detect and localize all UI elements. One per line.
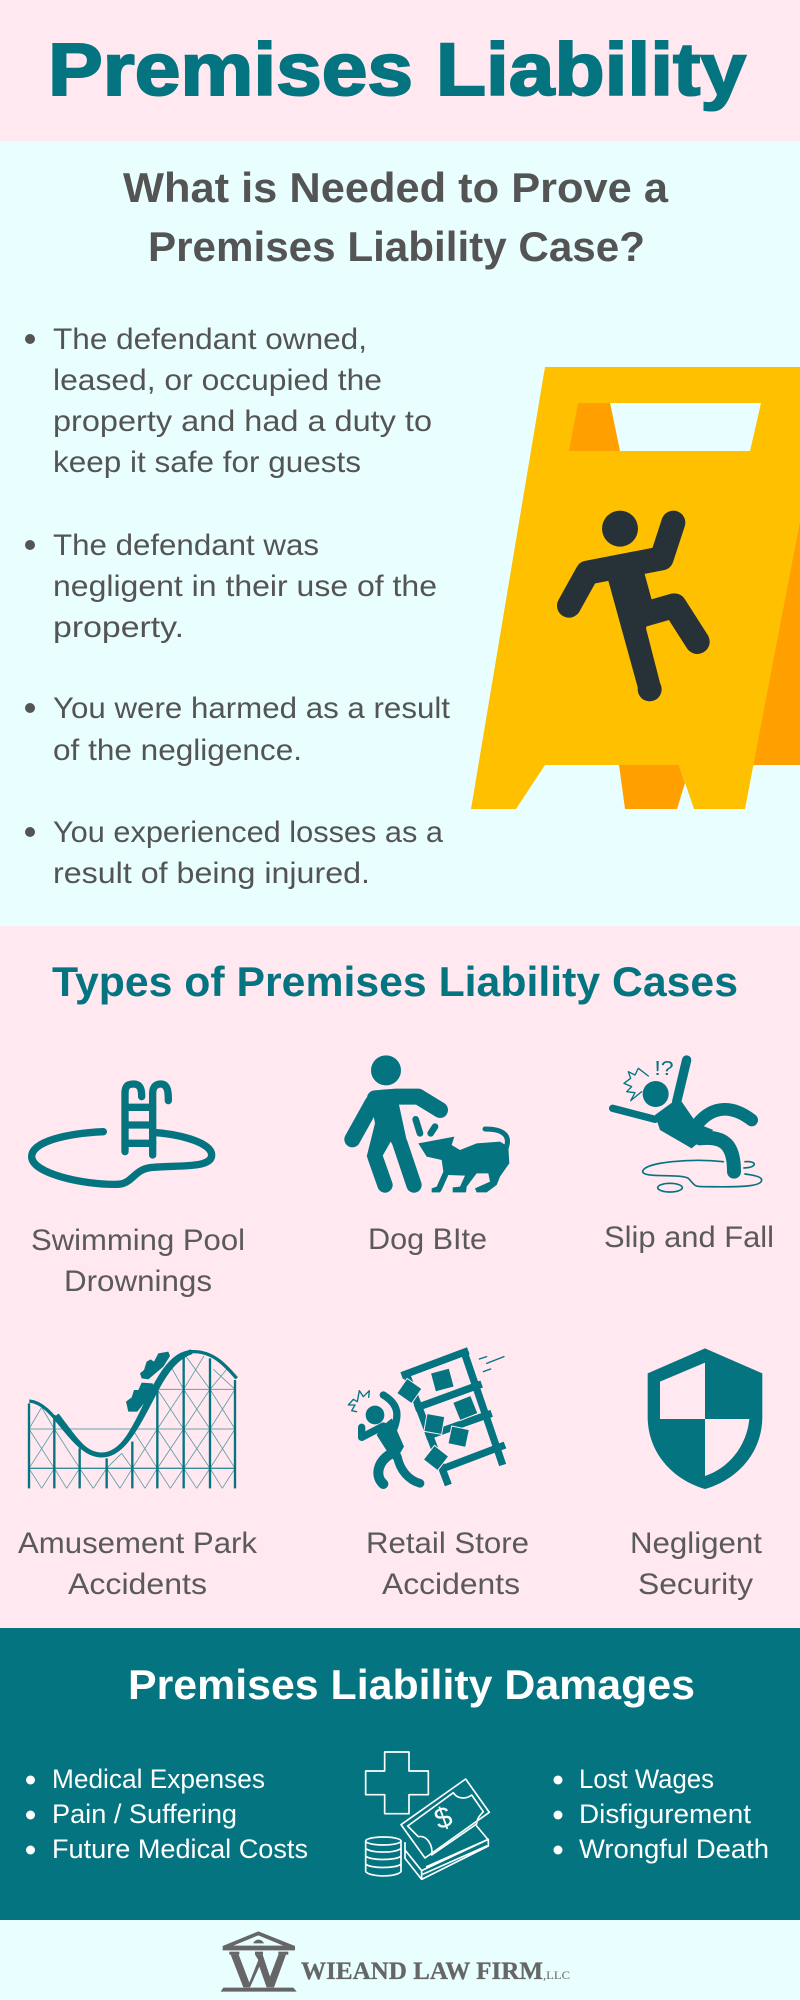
heading: what is needed xyxy=(123,164,669,270)
bullet list: requirements: keep it safe for guests xyxy=(53,446,361,479)
title: Premises Liability xyxy=(48,28,746,111)
bullet list: requirements: leased, or occupied the xyxy=(53,364,382,397)
heading: what is needed: Premises Liability Case? xyxy=(148,223,645,270)
label: slip and fall: Slip and Fall xyxy=(604,1221,774,1254)
list: damages left: Medical Expenses xyxy=(52,1764,265,1794)
icon: medical cross, cash and coins xyxy=(366,1752,489,1879)
panel: title band xyxy=(0,0,800,141)
bullet list: requirements: property and had a duty to xyxy=(53,405,432,438)
panel: footer xyxy=(0,1920,800,2000)
panel: what is needed to prove xyxy=(0,141,800,926)
heading: premises liability damages: Premises Liability Damages xyxy=(128,1661,695,1708)
bullet list: requirements: You experienced losses as a xyxy=(53,816,443,849)
label: swimming pool drownings xyxy=(31,1224,245,1298)
bullet list: requirements: result of being injured. xyxy=(53,857,370,890)
bullet list: requirements xyxy=(25,323,451,890)
list: damages right xyxy=(554,1764,769,1864)
icon: slip and fall xyxy=(613,1057,762,1192)
panel: damages xyxy=(0,1628,800,1920)
label: retail store accidents xyxy=(366,1527,529,1601)
panel: types of cases xyxy=(0,926,800,1628)
bullet list: requirements: The defendant was xyxy=(53,529,319,562)
icon: dog bite xyxy=(352,1055,509,1192)
list: damages right: Disfigurement xyxy=(579,1799,752,1829)
label: amusement park accidents xyxy=(18,1527,258,1601)
icon: security shield xyxy=(648,1348,762,1489)
label: amusement park accidents: Amusement Park xyxy=(18,1527,258,1560)
label: amusement park accidents: Accidents xyxy=(68,1568,207,1601)
heading: what is needed: What is Needed to Prove a xyxy=(123,164,669,211)
label: negligent security xyxy=(630,1527,763,1601)
label: negligent security: Security xyxy=(638,1568,753,1601)
label: swimming pool drownings: Drownings xyxy=(64,1265,212,1298)
bullet list: requirements: of the negligence. xyxy=(53,734,302,767)
bullet list: requirements: You were harmed as a result xyxy=(53,692,451,725)
bullet list: requirements: property. xyxy=(53,611,184,644)
bullet list: requirements: The defendant owned, xyxy=(53,323,367,356)
icon: retail store accident xyxy=(348,1351,505,1485)
logo: wieand law firm: ,LLC xyxy=(543,1968,570,1982)
logo: wieand law firm xyxy=(221,1931,570,1992)
icon: swimming pool xyxy=(32,1084,212,1184)
list: damages left xyxy=(26,1764,308,1864)
bullet list: requirements: negligent in their use of the xyxy=(53,570,437,603)
icon: roller coaster xyxy=(29,1352,237,1488)
logo: wieand law firm: WIEAND LAW FIRM xyxy=(301,1958,543,1985)
list: damages right: Wrongful Death xyxy=(579,1834,769,1864)
list: damages right: Lost Wages xyxy=(579,1764,714,1794)
icon: medical cross, cash and coins: $ xyxy=(430,1800,457,1836)
heading: types of premises liability cases: Types of Premises Liability Cases xyxy=(52,958,738,1005)
list: damages left: Pain / Suffering xyxy=(52,1799,237,1829)
label: dog bite: Dog BIte xyxy=(368,1223,487,1256)
label: retail store accidents: Retail Store xyxy=(366,1527,529,1560)
list: damages left: Future Medical Costs xyxy=(52,1834,308,1864)
label: swimming pool drownings: Swimming Pool xyxy=(31,1224,245,1257)
icon: wet floor sign xyxy=(471,367,800,809)
label: negligent security: Negligent xyxy=(630,1527,763,1560)
label: retail store accidents: Accidents xyxy=(382,1568,520,1601)
icon: slip and fall: !? xyxy=(654,1057,674,1080)
